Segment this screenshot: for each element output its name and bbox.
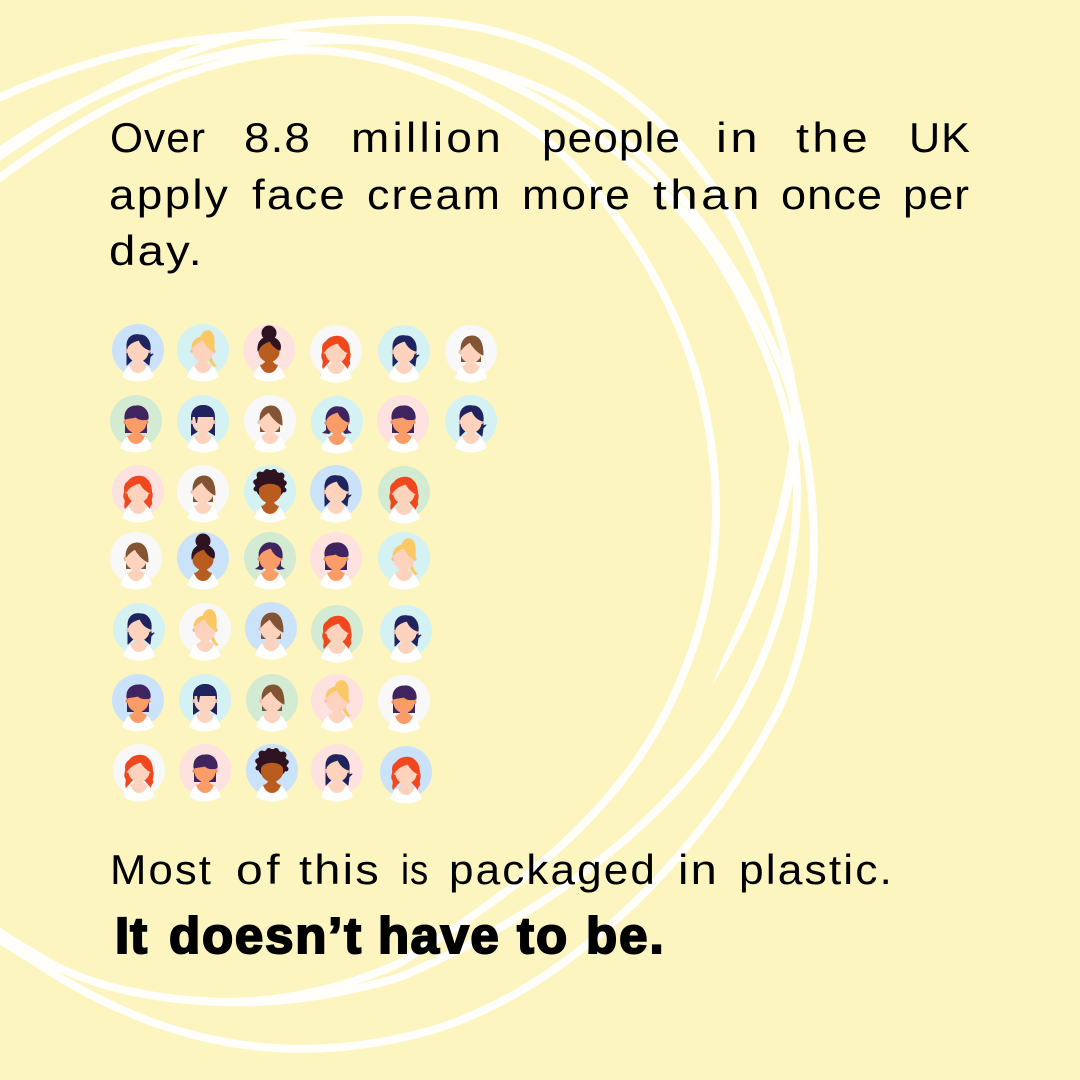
avatar r5c4 [311, 605, 363, 662]
heading: statistic: UK [909, 114, 971, 161]
avatar r4c2 [177, 532, 229, 590]
heading: statistic: once [781, 171, 883, 218]
scribbled white circle [0, 20, 814, 1049]
avatar r3c1 [112, 465, 164, 522]
heading: statistic: than [653, 171, 763, 218]
avatar r3c5 [378, 466, 430, 524]
text: plastic packaging: this [299, 846, 381, 893]
text: plastic packaging: is [401, 846, 429, 893]
avatar r7c4 [311, 744, 363, 802]
avatar r4c5 [378, 532, 430, 590]
heading: statistic: per [903, 171, 970, 218]
heading: statistic: people [542, 114, 681, 161]
avatar r1c6 [445, 325, 497, 382]
avatar r2c4 [311, 396, 363, 454]
avatar r3c2 [177, 465, 229, 522]
heading: statistic: Over [110, 114, 206, 161]
heading: statistic: day. [109, 227, 204, 274]
text: plastic packaging: in [678, 846, 719, 893]
avatar r4c1 [110, 532, 162, 590]
people grid [110, 324, 497, 804]
avatar r5c1 [113, 603, 165, 660]
heading: statistic: cream [367, 171, 502, 218]
avatar r1c5 [378, 325, 430, 382]
text: closing statement: It [115, 907, 148, 964]
avatar r2c5 [377, 395, 429, 452]
avatar r1c3 [243, 324, 295, 382]
heading: statistic: in [716, 114, 761, 161]
avatar r1c1 [112, 324, 164, 382]
heading: statistic: million [351, 114, 504, 161]
avatar r6c1 [112, 674, 164, 732]
avatar r2c1 [110, 395, 162, 452]
avatar r6c3 [246, 674, 298, 732]
avatar r4c3 [244, 532, 296, 590]
avatar r2c6 [445, 395, 497, 452]
avatar r4c4 [310, 532, 362, 590]
avatar r7c3 [246, 744, 298, 802]
avatar r5c2 [179, 603, 231, 660]
avatar r1c4 [310, 325, 362, 382]
avatar r6c4 [311, 674, 363, 732]
avatar r6c5 [378, 675, 430, 732]
avatar r5c5 [380, 605, 432, 662]
heading: statistic: 8.8 [244, 114, 311, 161]
text: plastic packaging: plastic. [739, 846, 894, 893]
avatar r7c5 [380, 746, 432, 804]
avatar r2c3 [244, 395, 296, 452]
text: plastic packaging: Most [110, 846, 213, 893]
text: closing statement: be. [586, 907, 666, 964]
avatar r3c3 [244, 465, 296, 522]
avatar r5c3 [245, 602, 297, 660]
text: plastic packaging: of [236, 846, 283, 893]
avatar r3c4 [310, 465, 362, 522]
avatar r6c2 [179, 674, 231, 732]
avatar r7c1 [113, 744, 165, 802]
avatar r1c2 [177, 324, 229, 382]
text: closing statement: doesn’t [169, 907, 363, 964]
text: closing statement: to [517, 907, 569, 964]
avatar r7c2 [179, 744, 231, 802]
avatar r2c2 [177, 395, 229, 452]
text: closing statement: have [378, 907, 500, 964]
heading: statistic: the [796, 114, 871, 161]
text: plastic packaging: packaged [449, 846, 657, 893]
heading: statistic: apply [109, 171, 230, 218]
heading: statistic: face [252, 171, 347, 218]
heading: statistic: more [522, 171, 632, 218]
